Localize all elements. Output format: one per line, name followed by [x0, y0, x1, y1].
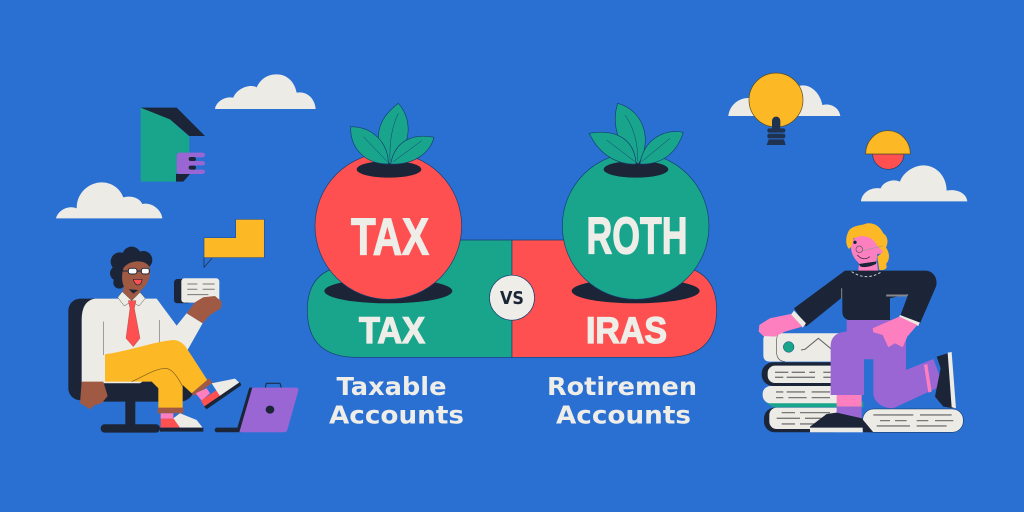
face [851, 235, 877, 266]
green roth ball [562, 153, 709, 299]
cloud lower left [56, 182, 162, 218]
caption: taxable accounts [329, 372, 464, 429]
book two [762, 362, 842, 386]
central comparison graphic [307, 103, 717, 357]
left illustration group [56, 74, 316, 433]
trouser cuffs [158, 378, 213, 413]
right illustration group [728, 73, 967, 432]
left hand [759, 314, 802, 337]
leaves on tax ball [351, 103, 434, 164]
caption: retirement accounts: Accounts [556, 400, 691, 429]
shirt [82, 299, 203, 383]
purple trousers [831, 320, 943, 408]
cloud right [861, 165, 967, 201]
icon: purple laptop [215, 383, 298, 432]
red tax ball [315, 153, 462, 299]
vs badge: VS [500, 288, 524, 309]
neck [858, 260, 878, 274]
ball hole right [604, 161, 668, 178]
vs badge [490, 275, 534, 320]
tie [126, 301, 140, 347]
open book under foot [863, 409, 963, 432]
shadow under tax ball [324, 279, 452, 303]
ball hole left [357, 161, 421, 178]
caption: retirement accounts: Rotiremen [547, 372, 697, 401]
icon: light bulb [749, 73, 803, 145]
cloud top left [215, 74, 316, 109]
right hand [873, 317, 917, 347]
chair [68, 299, 200, 433]
book one with chart [763, 333, 847, 362]
label: TAX on pill: TAX [359, 310, 425, 351]
caption: taxable accounts: Taxable [336, 372, 446, 401]
book three [763, 386, 863, 407]
left hand [80, 382, 108, 409]
icon: yellow speech bubble [204, 219, 264, 267]
note card [174, 278, 219, 303]
stack of books [762, 333, 963, 432]
label: IRAS on pill: IRAS [586, 310, 667, 351]
hair [846, 223, 889, 270]
raised shoe [196, 379, 241, 409]
label: ROTH on ball: ROTH [586, 208, 688, 266]
neck and head [110, 247, 152, 306]
book four [764, 408, 844, 432]
split pill base [307, 240, 717, 357]
collar [118, 292, 145, 306]
ear [873, 245, 884, 254]
yellow trousers [105, 340, 208, 408]
caption: taxable accounts: Accounts [329, 400, 464, 429]
black sweater [794, 271, 937, 327]
man sitting on chair [68, 247, 241, 433]
cloud behind bulb [728, 85, 840, 116]
trouser stripe [924, 364, 932, 393]
shadow under roth ball [572, 279, 700, 303]
lower leg and foot [810, 395, 873, 432]
icon: half sun [866, 131, 910, 169]
leaves on roth ball [589, 103, 683, 164]
woman kneeling [759, 223, 956, 432]
caption: retirement accounts [547, 372, 697, 429]
sweater cuffs [791, 311, 920, 328]
label: TAX on ball: TAX [351, 208, 429, 266]
kneeling shoe [935, 352, 956, 408]
icon: folded document [141, 108, 205, 182]
floor shoe [160, 413, 203, 432]
raised hand [187, 296, 222, 323]
